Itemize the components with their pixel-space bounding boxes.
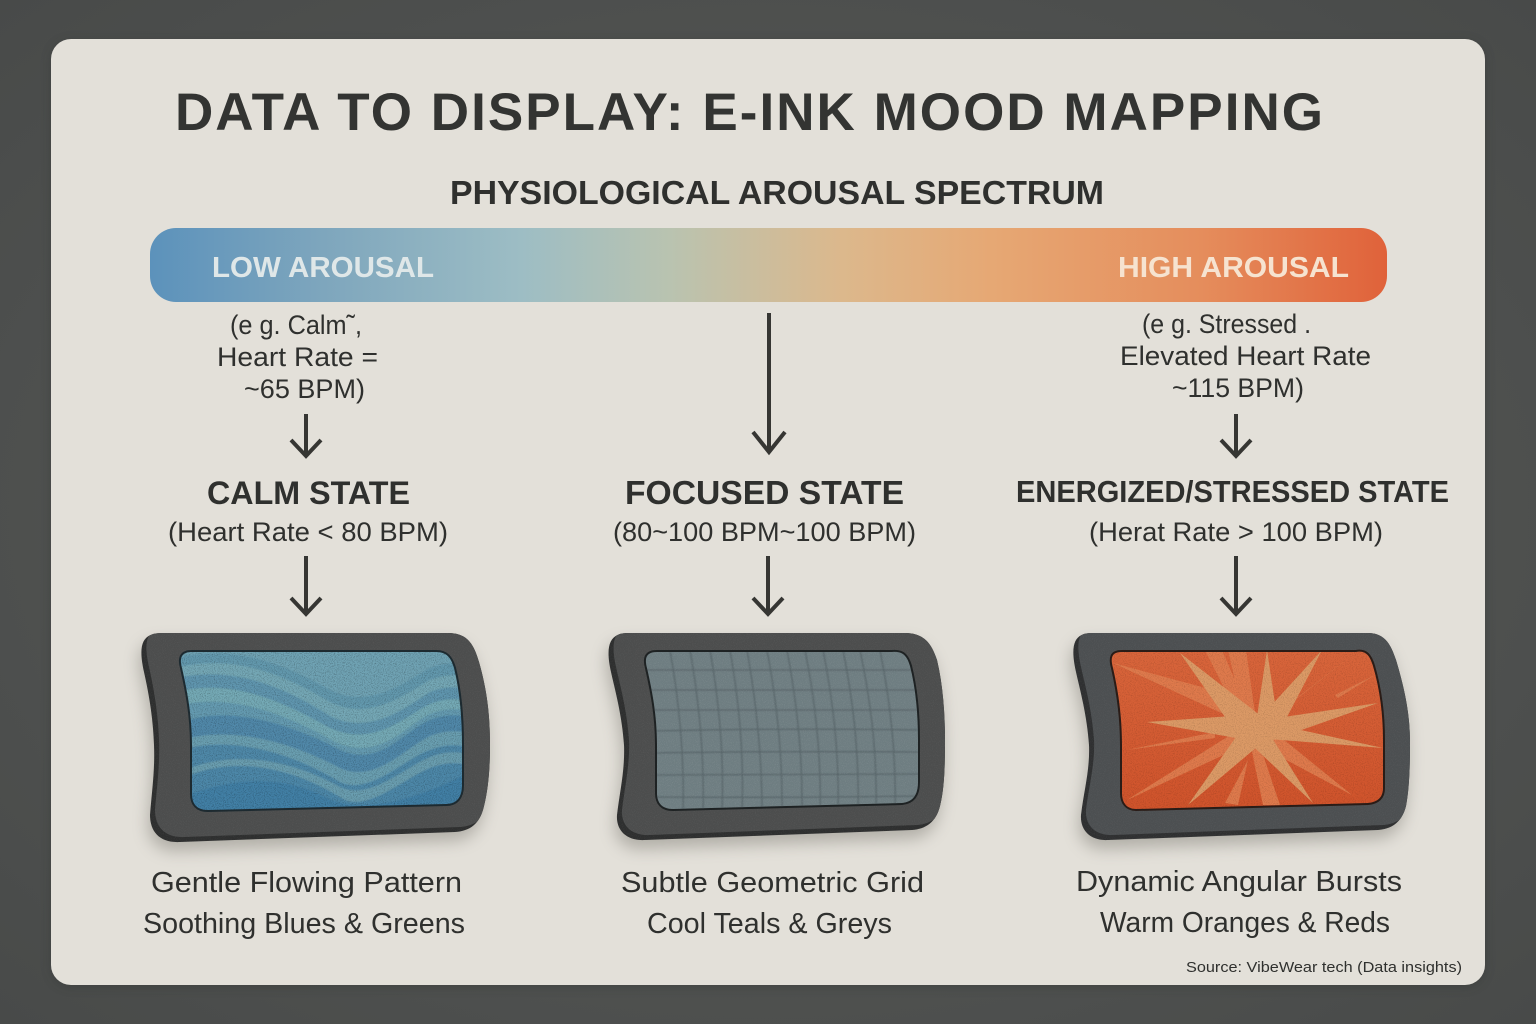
spectrum heading: PHYSIOLOGICAL AROUSAL SPECTRUM xyxy=(450,174,1104,211)
text block: high arousal example: ~115 BPM) xyxy=(1172,373,1304,403)
text block: high arousal example xyxy=(1120,309,1371,403)
heading: focused state: FOCUSED STATE xyxy=(625,474,904,511)
caption: energized display xyxy=(1076,866,1402,939)
caption: focused display: Subtle Geometric Grid xyxy=(621,867,924,899)
heading: calm state: CALM STATE xyxy=(207,475,410,511)
high arousal label: HIGH AROUSAL xyxy=(1118,252,1349,284)
caption: energized display: Dynamic Angular Bursts xyxy=(1076,866,1402,898)
text block: low arousal example: (e g. Calm˜, xyxy=(230,310,362,340)
text block: low arousal example: Heart Rate = xyxy=(217,342,378,372)
text block: high arousal example: (e g. Stressed . xyxy=(1142,309,1311,339)
caption: calm display: Soothing Blues & Greens xyxy=(143,908,465,940)
caption: focused display: Cool Teals & Greys xyxy=(647,908,892,940)
arrow: spectrum to focused state xyxy=(753,313,785,452)
burst pattern screen xyxy=(1105,648,1390,813)
text block: high arousal example: Elevated Heart Rate xyxy=(1120,341,1371,371)
device: focused grid display xyxy=(600,625,950,850)
text block: low arousal example: ~65 BPM) xyxy=(244,374,365,404)
arrow: low arousal to calm state xyxy=(291,414,321,456)
arrow: energized state to display xyxy=(1221,556,1251,614)
low arousal label: LOW AROUSAL xyxy=(212,252,434,284)
arousal gradient bar xyxy=(150,228,1387,302)
source note: Source: VibeWear tech (Data insights) xyxy=(1186,959,1462,976)
device: calm wave display xyxy=(135,625,495,851)
caption: focused display xyxy=(621,867,924,940)
grid pattern screen xyxy=(640,648,925,813)
energized range: (Herat Rate > 100 BPM) xyxy=(1089,517,1383,547)
focused range: (80~100 BPM~100 BPM) xyxy=(613,517,916,547)
text block: low arousal example xyxy=(217,310,378,404)
caption: calm display: Gentle Flowing Pattern xyxy=(151,867,462,899)
caption: calm display xyxy=(143,867,465,940)
heading: energized state: ENERGIZED/STRESSED STATE xyxy=(1016,474,1449,509)
arrow: high arousal to energized state xyxy=(1221,414,1251,456)
arrow: focused state to display xyxy=(753,556,783,614)
title: DATA TO DISPLAY: E-INK MOOD MAPPING xyxy=(175,83,1323,142)
wave pattern screen xyxy=(180,652,462,810)
arrow: calm state to display xyxy=(291,556,321,614)
device: energized burst display xyxy=(1065,625,1415,850)
calm range: (Heart Rate < 80 BPM) xyxy=(168,517,448,547)
caption: energized display: Warm Oranges & Reds xyxy=(1100,907,1390,939)
